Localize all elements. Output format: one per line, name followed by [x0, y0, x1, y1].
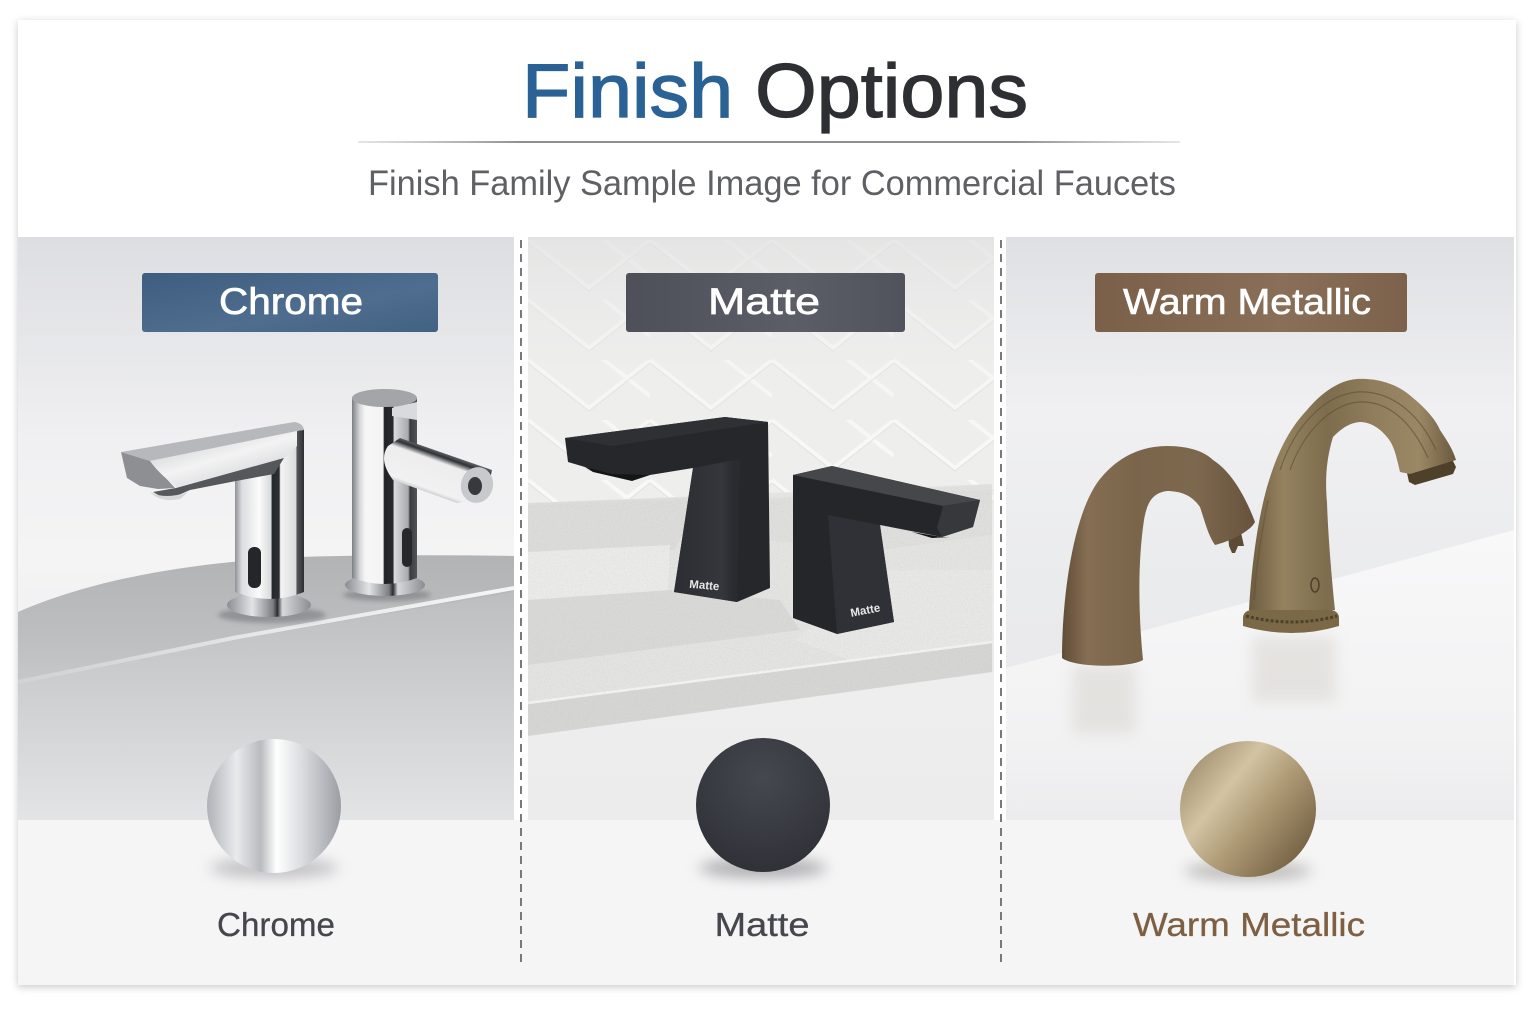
swatch: chrome	[207, 739, 341, 878]
panel label: Warm Metallic: Warm Metallic	[1123, 281, 1371, 322]
caption: matte: Matte	[714, 906, 810, 943]
title: Finish Options	[522, 49, 1028, 134]
icon: matte faucet left	[565, 417, 770, 602]
swatch: warm metallic	[1180, 741, 1316, 881]
title rule	[358, 141, 1180, 143]
panel label: Chrome	[142, 273, 438, 332]
swatch: matte	[696, 738, 830, 878]
caption: warm metallic: Warm Metallic	[1133, 906, 1365, 943]
panel label: Matte	[626, 273, 905, 332]
divider right	[1000, 240, 1002, 968]
panel label: Matte: Matte	[708, 281, 820, 322]
panel: warm metallic	[1006, 237, 1514, 820]
bottom band	[18, 820, 1514, 985]
panel: matte	[528, 237, 994, 820]
caption: chrome: Chrome	[217, 906, 335, 943]
panel label: Chrome: Chrome	[219, 281, 363, 322]
panel: chrome	[18, 237, 514, 820]
divider left	[520, 240, 522, 968]
icon: chrome faucet left	[121, 422, 326, 623]
icon: matte faucet right	[793, 466, 980, 634]
icon: bronze faucet right	[1243, 379, 1456, 702]
icon: matte faucet left: Matte	[689, 579, 720, 593]
icon: matte faucet right: Matte	[850, 602, 881, 620]
panel label: Warm Metallic	[1095, 273, 1407, 332]
icon: chrome faucet right	[343, 389, 497, 601]
subtitle: Finish Family Sample Image for Commercial Faucets	[368, 164, 1176, 203]
icon: bronze faucet left	[1062, 446, 1255, 734]
